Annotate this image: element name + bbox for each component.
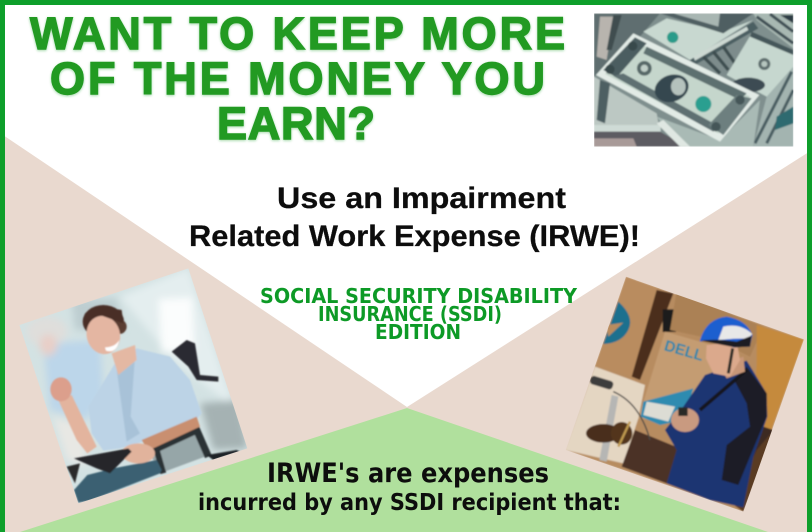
clipboard [74,448,132,473]
panel: white top section [0,0,812,407]
photo: pile of dollar bills [594,13,793,147]
heading: use an IRWE: Related Work Expense (IRWE)! [189,220,640,253]
bottom text: IRWE definition: incurred by any SSDI recipient that: [198,490,621,516]
bike [589,375,614,390]
photo: man with bicycle helmet [566,277,804,512]
subheading: SSDI edition: INSURANCE (SSDI) [318,302,502,326]
wheelchair [172,340,218,382]
subheading: SSDI edition [260,284,577,344]
white cabinet [566,367,645,463]
neck [112,345,137,375]
subheading: SSDI edition: EDITION [375,320,461,344]
face [86,314,121,355]
shirt [88,348,202,451]
subheading: SSDI edition: SOCIAL SECURITY DISABILITY [260,284,577,308]
lower arm [142,417,200,451]
neck and face [720,357,745,378]
bottom text: IRWE definition [198,458,621,516]
heading: use an IRWE [189,182,640,253]
hands [671,408,699,432]
photo: man with bicycle helmet: DELL [662,338,705,365]
title: EARN? [217,98,375,149]
boxes [634,280,660,289]
title: WANT TO KEEP MORE [30,8,565,59]
main bill [596,33,759,142]
title [30,8,565,149]
hair [83,305,124,338]
wall right [753,325,804,433]
bottom text: IRWE definition: IRWE's are expenses [267,458,549,489]
title: OF THE MONEY YOU [50,53,545,104]
jacket [665,361,767,507]
raised arm [58,395,97,453]
jeans [74,460,162,503]
furniture [622,430,680,483]
helmet [700,317,752,347]
panel: green bottom section [20,408,768,532]
heading: use an IRWE: Use an Impairment [277,182,566,215]
photo: woman in wheelchair [19,268,247,503]
